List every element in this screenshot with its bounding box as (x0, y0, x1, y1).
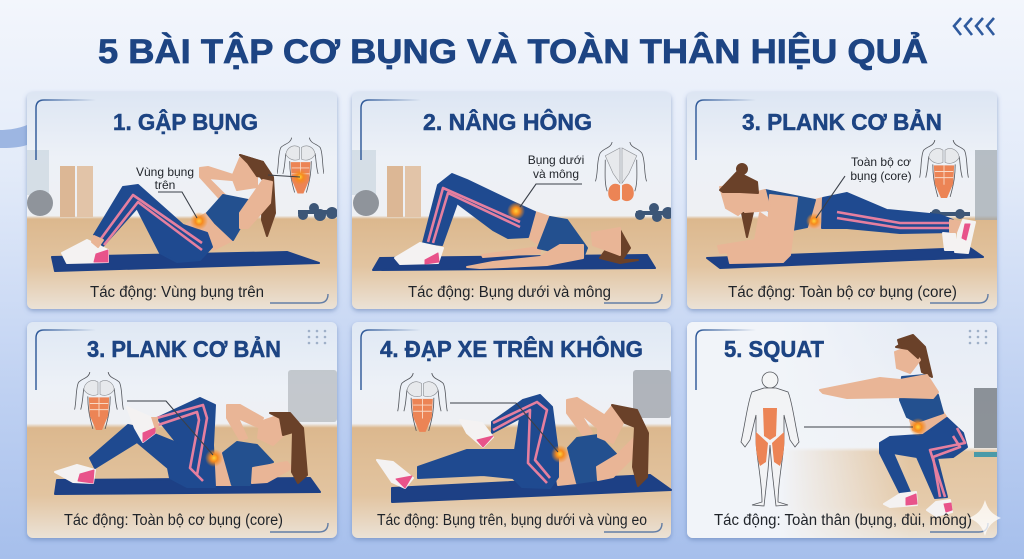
caption: Tác động: Toàn thân (bụng, đùi, mông) (714, 512, 972, 529)
caption: Tác động: Vùng bụng trên (90, 284, 264, 301)
label: và mông (533, 167, 579, 181)
leader line (816, 176, 845, 218)
target glow (190, 169, 308, 230)
card frame (36, 330, 328, 532)
leader line (127, 401, 213, 455)
caption: Tác động: Bụng dưới và mông (408, 284, 611, 301)
target glow (205, 449, 223, 467)
exercise mat (392, 475, 671, 502)
gym background props (27, 150, 338, 221)
heading: 3. PLANK CƠ BẢN (87, 334, 281, 362)
card frame (361, 330, 662, 532)
target glow (551, 445, 569, 463)
icon: chevrons (954, 18, 994, 35)
card frame (361, 100, 662, 303)
exercise mat (373, 255, 655, 270)
woman doing bicycle crunch (377, 395, 648, 488)
dots decoration (969, 330, 987, 344)
woman doing bridge (395, 174, 638, 268)
woman doing squat (820, 335, 967, 516)
panel: 1. gập bụng (27, 92, 338, 309)
gym background props (633, 370, 671, 418)
leader line (520, 184, 582, 207)
decorative swoosh (0, 125, 27, 148)
panel: 4. đạp xe trên không (352, 322, 671, 538)
icon: back anatomy (595, 142, 647, 201)
label: Toàn bộ cơ (851, 155, 911, 169)
card frame (36, 100, 328, 303)
icon: full body anatomy (741, 372, 799, 506)
caption: Tác động: Toàn bộ cơ bụng (core) (64, 512, 283, 529)
woman doing plank (718, 164, 975, 263)
label: Vùng bụng (136, 165, 194, 179)
dots decoration (308, 330, 326, 344)
exercise mat (707, 248, 983, 268)
woman doing crunch (62, 155, 275, 263)
heading: 1. GẬP BỤNG (113, 108, 258, 135)
icon: torso anatomy (398, 373, 447, 432)
card frame (696, 330, 988, 532)
white fade overlay (687, 322, 997, 538)
leader line (804, 426, 913, 428)
gym background props (288, 370, 337, 422)
exercise mat (52, 252, 319, 271)
label: bụng (core) (850, 169, 912, 183)
sparkle decoration (969, 500, 1001, 536)
panel: 2. nâng hông (352, 92, 674, 309)
icon: torso anatomy (920, 140, 968, 198)
leader line (450, 403, 558, 452)
title: 5 BÀI TẬP CƠ BỤNG VÀ TOÀN THÂN HIỆU QUẢ (98, 33, 928, 71)
heading: 3. PLANK CƠ BẢN (742, 107, 942, 135)
icon: torso anatomy (75, 372, 123, 430)
gym background props (352, 150, 674, 222)
caption: Tác động: Bụng trên, bụng dưới và vùng eo (377, 512, 647, 529)
target glow (806, 213, 822, 229)
exercise mat (55, 478, 320, 494)
card frame (696, 100, 988, 303)
leader lines (158, 175, 300, 218)
label: Bụng dưới (528, 153, 584, 167)
label: trên (155, 178, 175, 192)
icon: torso anatomy (277, 138, 324, 193)
target glow (507, 202, 525, 220)
heading: 4. ĐẠP XE TRÊN KHÔNG (380, 335, 643, 362)
heading: 2. NÂNG HÔNG (423, 108, 592, 135)
panel: 3. plank cơ bản (row 2) (27, 322, 337, 538)
panel: 5. squat (687, 322, 997, 538)
rack props (974, 388, 997, 457)
heading: 5. SQUAT (724, 336, 824, 362)
target glow (909, 418, 927, 436)
panel: 3. plank cơ bản (687, 92, 997, 309)
gym background props (930, 150, 997, 220)
woman doing bicycle crunch (55, 398, 307, 487)
caption: Tác động: Toàn bộ cơ bụng (core) (728, 284, 957, 301)
